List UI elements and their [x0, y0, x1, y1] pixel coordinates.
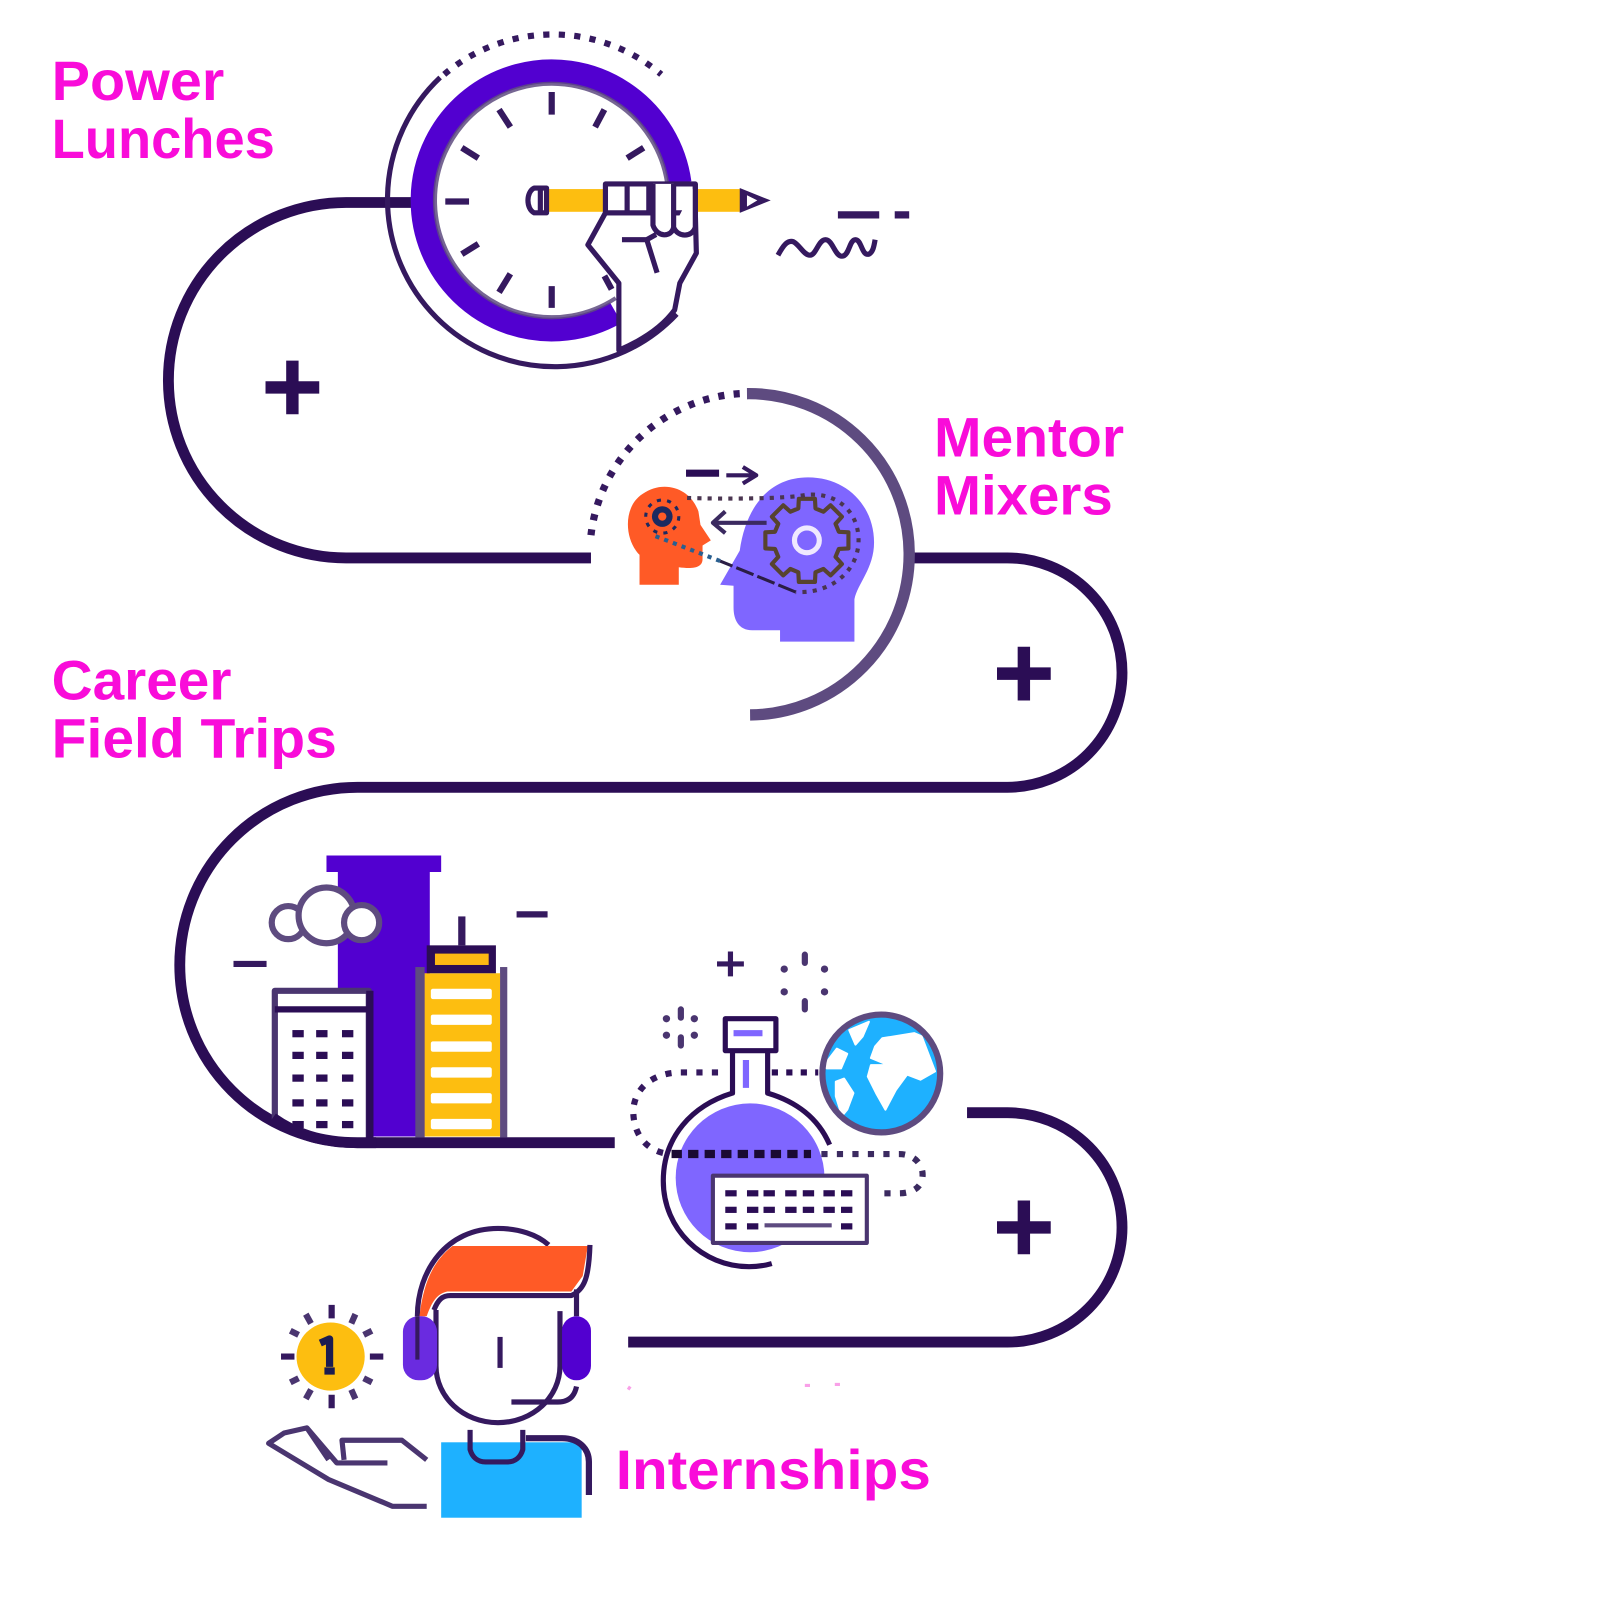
path: serpentine route: [168, 202, 1122, 1342]
heading: Power Lunches: Power: [52, 49, 224, 112]
icon: mentor and mentee heads with gear: [591, 394, 909, 715]
heading: Mentor Mixers: Mixers: [934, 464, 1113, 527]
squiggle and dashes: [778, 215, 909, 256]
left dotted loop: [633, 1072, 718, 1153]
heading: Power Lunches: [52, 49, 275, 170]
flask highlights: [734, 1033, 762, 1088]
shirt: [441, 1442, 582, 1518]
icon: flask with keyboard and globe: [633, 952, 940, 1267]
flask purple liquid: [676, 1103, 824, 1252]
clock ticks: [445, 92, 644, 308]
arrow right: [726, 467, 756, 484]
yellow tower: [415, 916, 507, 1138]
purple tower: [326, 855, 441, 1136]
keyboard: [713, 1176, 867, 1243]
right headphone: [562, 1316, 591, 1380]
icon: city buildings and cloud: [233, 855, 548, 1145]
face: [436, 1310, 560, 1423]
cloud: [272, 887, 379, 943]
pencil: [528, 188, 771, 213]
nose: [498, 1337, 503, 1368]
hair: [419, 1246, 588, 1316]
heading: Mentor Mixers: Mentor: [934, 406, 1124, 469]
icon: plus sign 1: [266, 361, 319, 414]
windows: [292, 1030, 353, 1128]
sparkle right: [784, 955, 825, 1009]
route curve over building: [273, 1118, 376, 1143]
globe: [822, 1015, 940, 1132]
orange head: [628, 487, 711, 585]
headband: [417, 1228, 549, 1316]
clock outer arc: [388, 77, 677, 367]
clock dotted arc: [444, 34, 661, 74]
icon: clock with pencil and fist: [388, 34, 909, 367]
clock purple ring: [423, 71, 680, 330]
flask outline: [663, 1019, 830, 1267]
left headphone: [403, 1316, 437, 1380]
dotted link between heads: [687, 495, 859, 592]
heading: Power Lunches: Lunches: [52, 107, 275, 170]
gear: [765, 499, 848, 582]
heading: Internships: Internships: [616, 1438, 931, 1501]
shoulder: [526, 1438, 589, 1495]
sun badge: [281, 1305, 383, 1408]
fist: [588, 184, 696, 350]
microphone: [511, 1387, 577, 1402]
mentor thick arc: [747, 394, 909, 715]
dashes: [233, 914, 548, 964]
icon: person with headset and award in hand: [269, 1228, 591, 1518]
middle dashed line: [672, 1150, 811, 1158]
icon: plus sign 3: [997, 1201, 1051, 1254]
heading: Career Field Trips: Field Trips: [52, 706, 337, 769]
collar: [470, 1430, 523, 1462]
white building: [273, 991, 376, 1145]
heading: Career Field Trips: Career: [52, 648, 231, 711]
mentor dotted arc: [591, 394, 740, 535]
sparkle left: [666, 1009, 694, 1046]
small plus: [717, 952, 744, 976]
heading: Mentor Mixers: [934, 406, 1124, 527]
hair outline: [434, 1245, 590, 1316]
specks: [628, 1384, 840, 1390]
arrow left: [713, 511, 767, 533]
heading: Career Field Trips: [52, 648, 337, 769]
icon: plus sign 2: [997, 647, 1051, 700]
purple head: [720, 477, 874, 642]
small gear in orange head: [646, 500, 679, 533]
dotted link to globe: [772, 1069, 818, 1075]
hand: [269, 1428, 427, 1506]
